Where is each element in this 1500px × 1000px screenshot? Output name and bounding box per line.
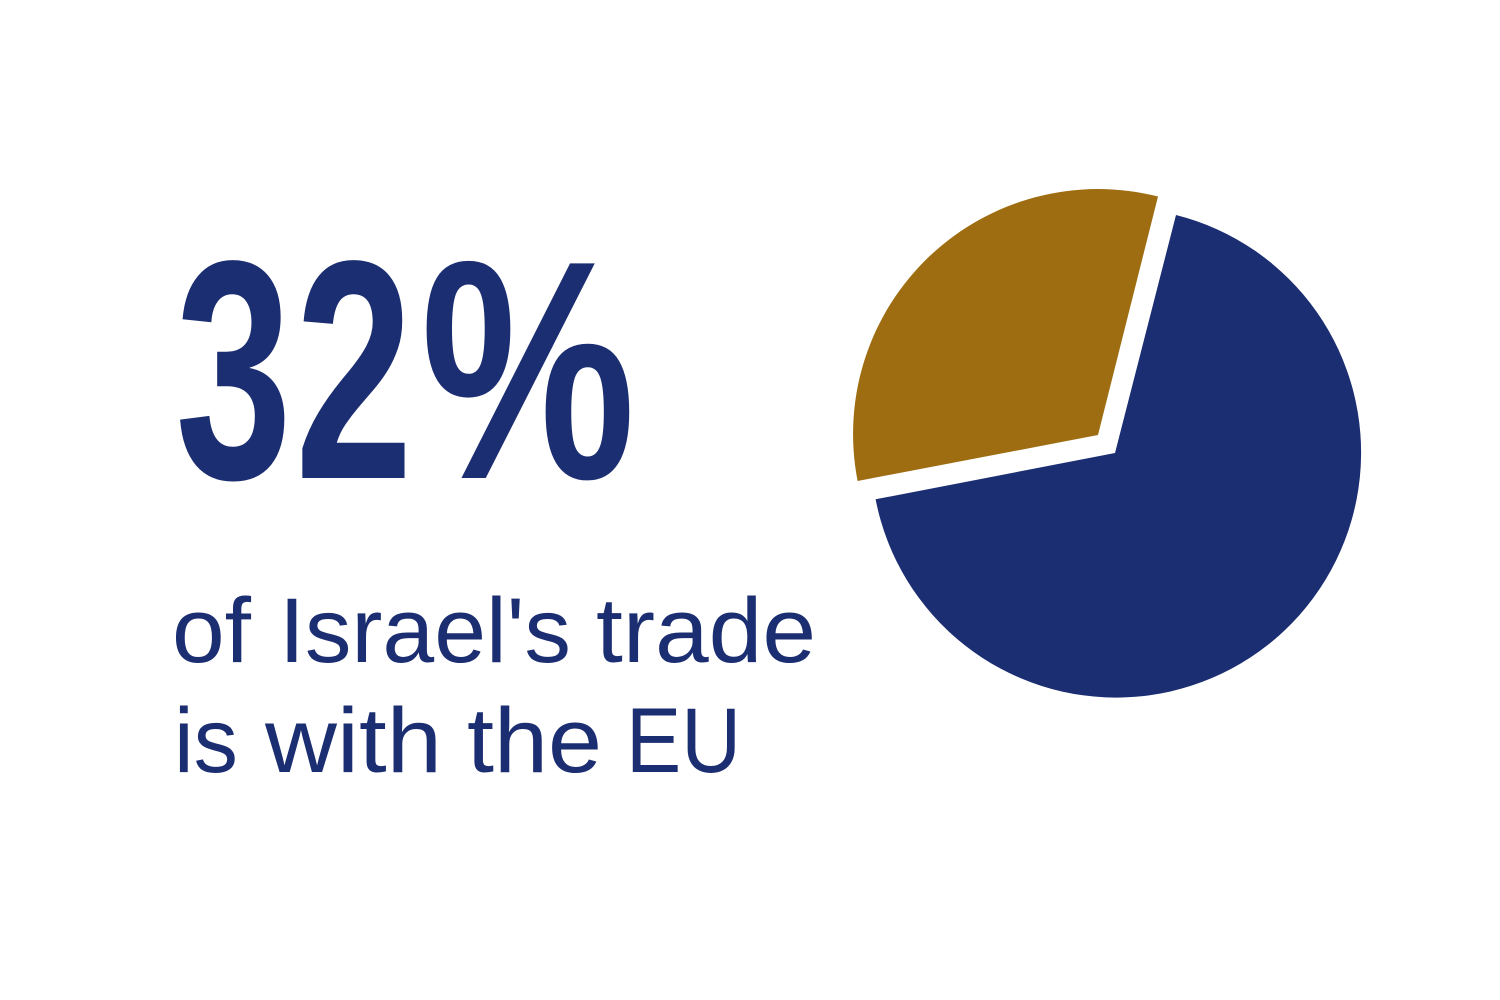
- caption: of Israel's trade is with the EU: of: [172, 580, 251, 682]
- headline: 32%: [175, 195, 636, 545]
- caption: of Israel's trade is with the EU: EU: [626, 690, 741, 792]
- headline: 32%: 3: [175, 196, 292, 545]
- caption: of Israel's trade is with the EU: [172, 580, 816, 792]
- pie chart: EU share of trade: [853, 189, 1361, 698]
- caption: of Israel's trade is with the EU: trade: [596, 580, 816, 682]
- caption: of Israel's trade is with the EU: with: [264, 690, 442, 792]
- pie slice: rest of trade 68%: [876, 215, 1361, 698]
- pie slice: EU 32%: [853, 189, 1158, 481]
- headline: 32%: %: [421, 196, 636, 545]
- headline: 32%: 2: [295, 195, 413, 545]
- caption: of Israel's trade is with the EU: is: [174, 690, 238, 792]
- caption: of Israel's trade is with the EU: Israel's: [279, 580, 571, 682]
- caption: of Israel's trade is with the EU: the: [467, 690, 602, 792]
